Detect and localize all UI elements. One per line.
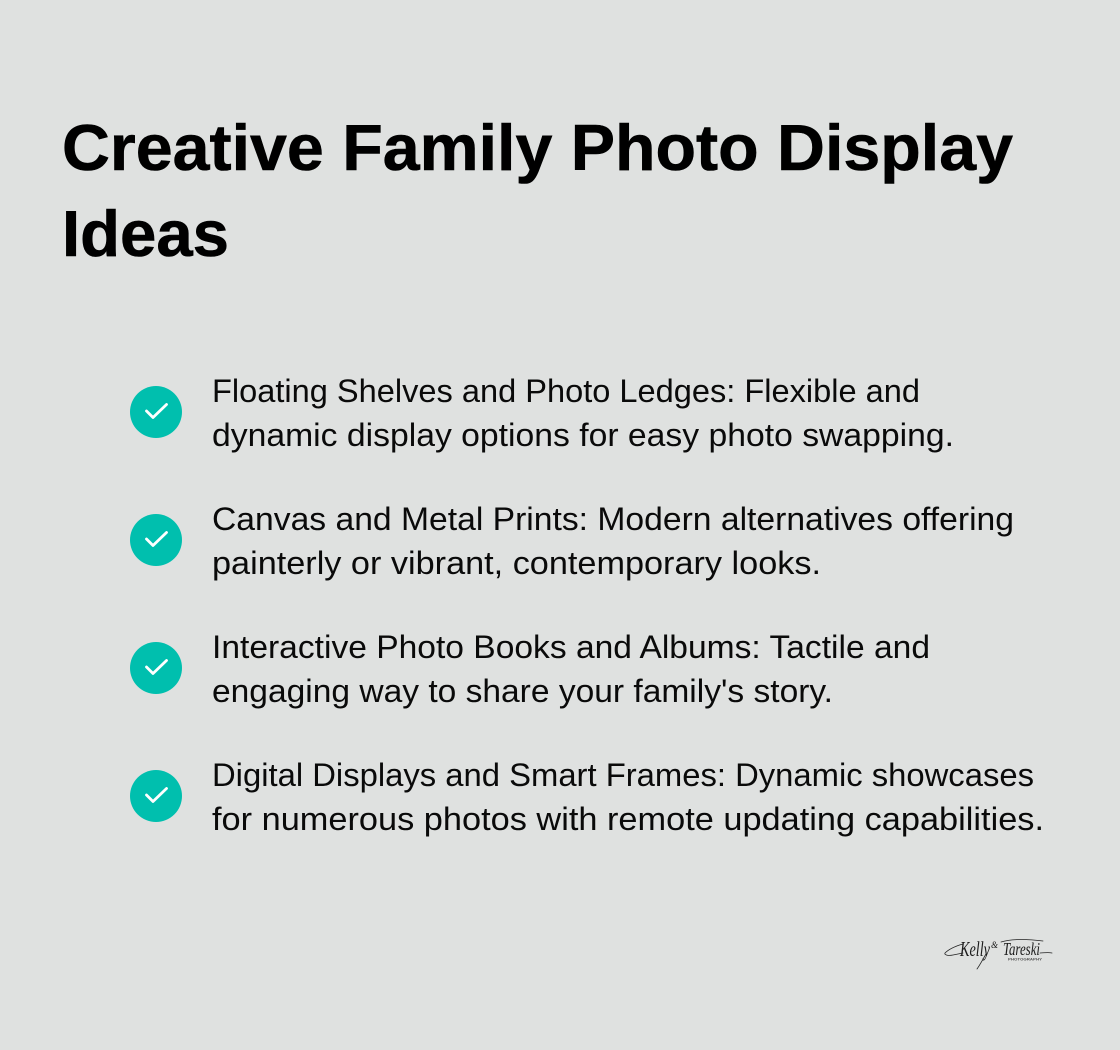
list item 3: photo books: [130, 629, 930, 709]
icon: check circle 2: [130, 514, 182, 566]
title: [62, 111, 1013, 270]
text: digital displays: [212, 757, 1044, 837]
text: photo books: engaging way to share your family's story.: [212, 673, 833, 709]
text: photo books: Interactive Photo Books and Albums: Tactile and: [212, 629, 930, 665]
text: canvas and metal: [212, 501, 1014, 581]
text: floating shelves: [212, 373, 954, 453]
logo: signature: Kelly: [959, 937, 990, 961]
text: photo books: [212, 629, 930, 709]
icon: check circle 3: [130, 642, 182, 694]
list item 2: canvas and metal: [130, 501, 1014, 581]
list item 4: digital displays: [130, 757, 1044, 837]
text: floating shelves: dynamic display options for easy photo swapping.: [212, 417, 954, 453]
text: digital displays: for numerous photos with remote updating capabilities.: [212, 801, 1044, 837]
icon: check circle 4: [130, 770, 182, 822]
logo: signature: &: [991, 940, 998, 950]
list item 1: floating shelves: [130, 373, 954, 453]
title: Ideas: [62, 197, 229, 270]
logo: signature: PHOTOGRAPHY: [1008, 958, 1043, 962]
logo: signature: [945, 937, 1052, 969]
text: canvas and metal: Canvas and Metal Prints: Modern alternatives offering: [212, 501, 1014, 537]
logo: signature: Tareski: [1003, 939, 1040, 959]
text: floating shelves: Floating Shelves and Photo Ledges: Flexible and: [212, 373, 920, 409]
icon: check circle 1: [130, 386, 182, 438]
title: Creative Family Photo Display: [62, 111, 1013, 184]
text: digital displays: Digital Displays and Smart Frames: Dynamic showcases: [212, 757, 1034, 793]
text: canvas and metal: painterly or vibrant, contemporary looks.: [212, 545, 821, 581]
